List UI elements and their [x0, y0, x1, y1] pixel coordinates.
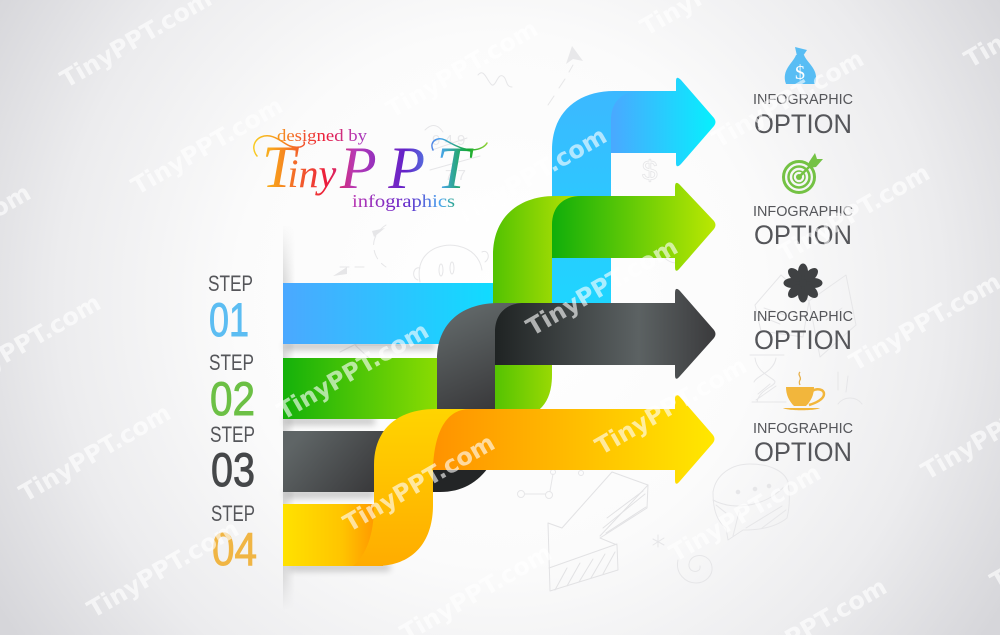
option 1 text: INFOGRAPHIC — [753, 91, 853, 108]
doodle: big hatched arrow — [548, 472, 648, 591]
step 3 label — [210, 422, 255, 496]
option 2 text — [753, 203, 853, 250]
option 3 text: OPTION — [754, 325, 852, 355]
green arrow: step 2 — [283, 183, 716, 419]
doodle: dashed up arrow — [548, 46, 583, 105]
doodle: house with hatching — [755, 275, 856, 357]
step 2 label: 02 — [210, 372, 255, 425]
doodle: speech bubble — [713, 464, 789, 540]
step 3 label: STEP — [210, 422, 255, 447]
option 1 text: OPTION — [754, 109, 852, 139]
watermarks: TinyPPT.com — [707, 44, 869, 154]
doodle: arrow tips — [333, 228, 385, 276]
doodle: squiggle — [478, 73, 512, 87]
doodle: face — [414, 245, 488, 282]
step 4 label: STEP — [211, 501, 255, 526]
step 1 label: 01 — [209, 293, 249, 346]
side panel shadow at the band edge — [283, 239, 292, 599]
blue arrow: step 1 — [283, 78, 716, 344]
option 1 text — [753, 91, 853, 139]
watermarks: TinyPPT.com — [14, 398, 176, 508]
logo line: designed by: designed by — [277, 126, 368, 145]
watermarks: TinyPPT.com — [381, 14, 543, 124]
watermarks: TinyPPT.com — [590, 351, 752, 461]
icon: target — [784, 153, 823, 192]
yellow left band — [283, 504, 383, 566]
icon: flower — [784, 264, 822, 302]
dark lower curl — [400, 465, 490, 492]
watermarks: TinyPPT.com — [82, 514, 244, 624]
step 4 label — [211, 501, 257, 575]
step labels — [208, 271, 257, 575]
step 3 label: 03 — [211, 443, 255, 496]
option 4 text: INFOGRAPHIC — [753, 420, 853, 437]
green arrow head and shaft — [552, 183, 716, 271]
doodle: network nodes — [518, 470, 584, 498]
logo wordmark: PPT: PPT — [339, 135, 474, 201]
step 1 label: STEP — [208, 271, 253, 296]
option 2 text: OPTION — [754, 220, 852, 250]
watermarks: TinyPPT.com — [126, 91, 288, 201]
blue arrow head and shaft — [611, 78, 716, 166]
yellow arrow head and shaft — [433, 395, 714, 484]
option 3 text: INFOGRAPHIC — [753, 308, 853, 325]
watermarks: TinyPPT.com — [773, 158, 935, 268]
watermarks: TinyPPT.com — [521, 232, 683, 342]
green left band — [283, 358, 503, 419]
doodle: asterisk — [653, 535, 664, 547]
option 2 text: INFOGRAPHIC — [753, 203, 853, 220]
step 2 label: STEP — [209, 350, 254, 375]
logo — [254, 126, 487, 211]
doodle: small marks behind the lower rows — [340, 252, 690, 359]
logo swashes — [254, 136, 487, 156]
band shadows — [285, 342, 435, 571]
doodle: math numbers — [425, 126, 480, 184]
watermarks: TinyPPT.com — [450, 121, 612, 231]
green vertical fold — [493, 196, 600, 419]
doodle sketches in the background — [333, 46, 862, 591]
doodle: spiral — [677, 555, 712, 583]
option 4 text — [753, 420, 853, 467]
doodle: lines — [838, 372, 862, 404]
doodle: dashed curved arrow — [340, 225, 386, 267]
step 1 label — [208, 271, 253, 346]
doodle: hourglass — [750, 355, 786, 402]
logo line: infographics: infographics — [352, 191, 455, 211]
doodle: math numbers: 9 4 9 — [432, 132, 465, 149]
icon: coffee cup — [783, 372, 824, 410]
watermarks: TinyPPT.com — [272, 316, 434, 426]
option 4 text: OPTION — [754, 437, 852, 467]
doodle: dollar: $ — [642, 155, 658, 186]
dark arrow head and shaft — [495, 289, 716, 379]
blue vertical fold — [552, 91, 650, 340]
option 3 text — [753, 308, 853, 355]
watermarks: TinyPPT.com — [338, 428, 500, 538]
dark arrow: step 3 — [283, 289, 716, 492]
watermarks: TinyPPT.com — [664, 458, 826, 568]
blue left band — [283, 283, 498, 344]
logo wordmark: Tiny: Tiny — [262, 134, 336, 200]
doodle: math numbers: 7 7 — [445, 167, 466, 184]
icon: money bag: $ — [795, 62, 805, 84]
step 4 label: 04 — [212, 523, 257, 575]
yellow S-fold — [353, 409, 480, 566]
icon: money bag — [785, 47, 816, 84]
dark vertical fold — [437, 303, 540, 440]
step 2 label — [209, 350, 255, 425]
dark left band — [283, 431, 393, 492]
yellow arrow: step 4 — [283, 395, 714, 566]
